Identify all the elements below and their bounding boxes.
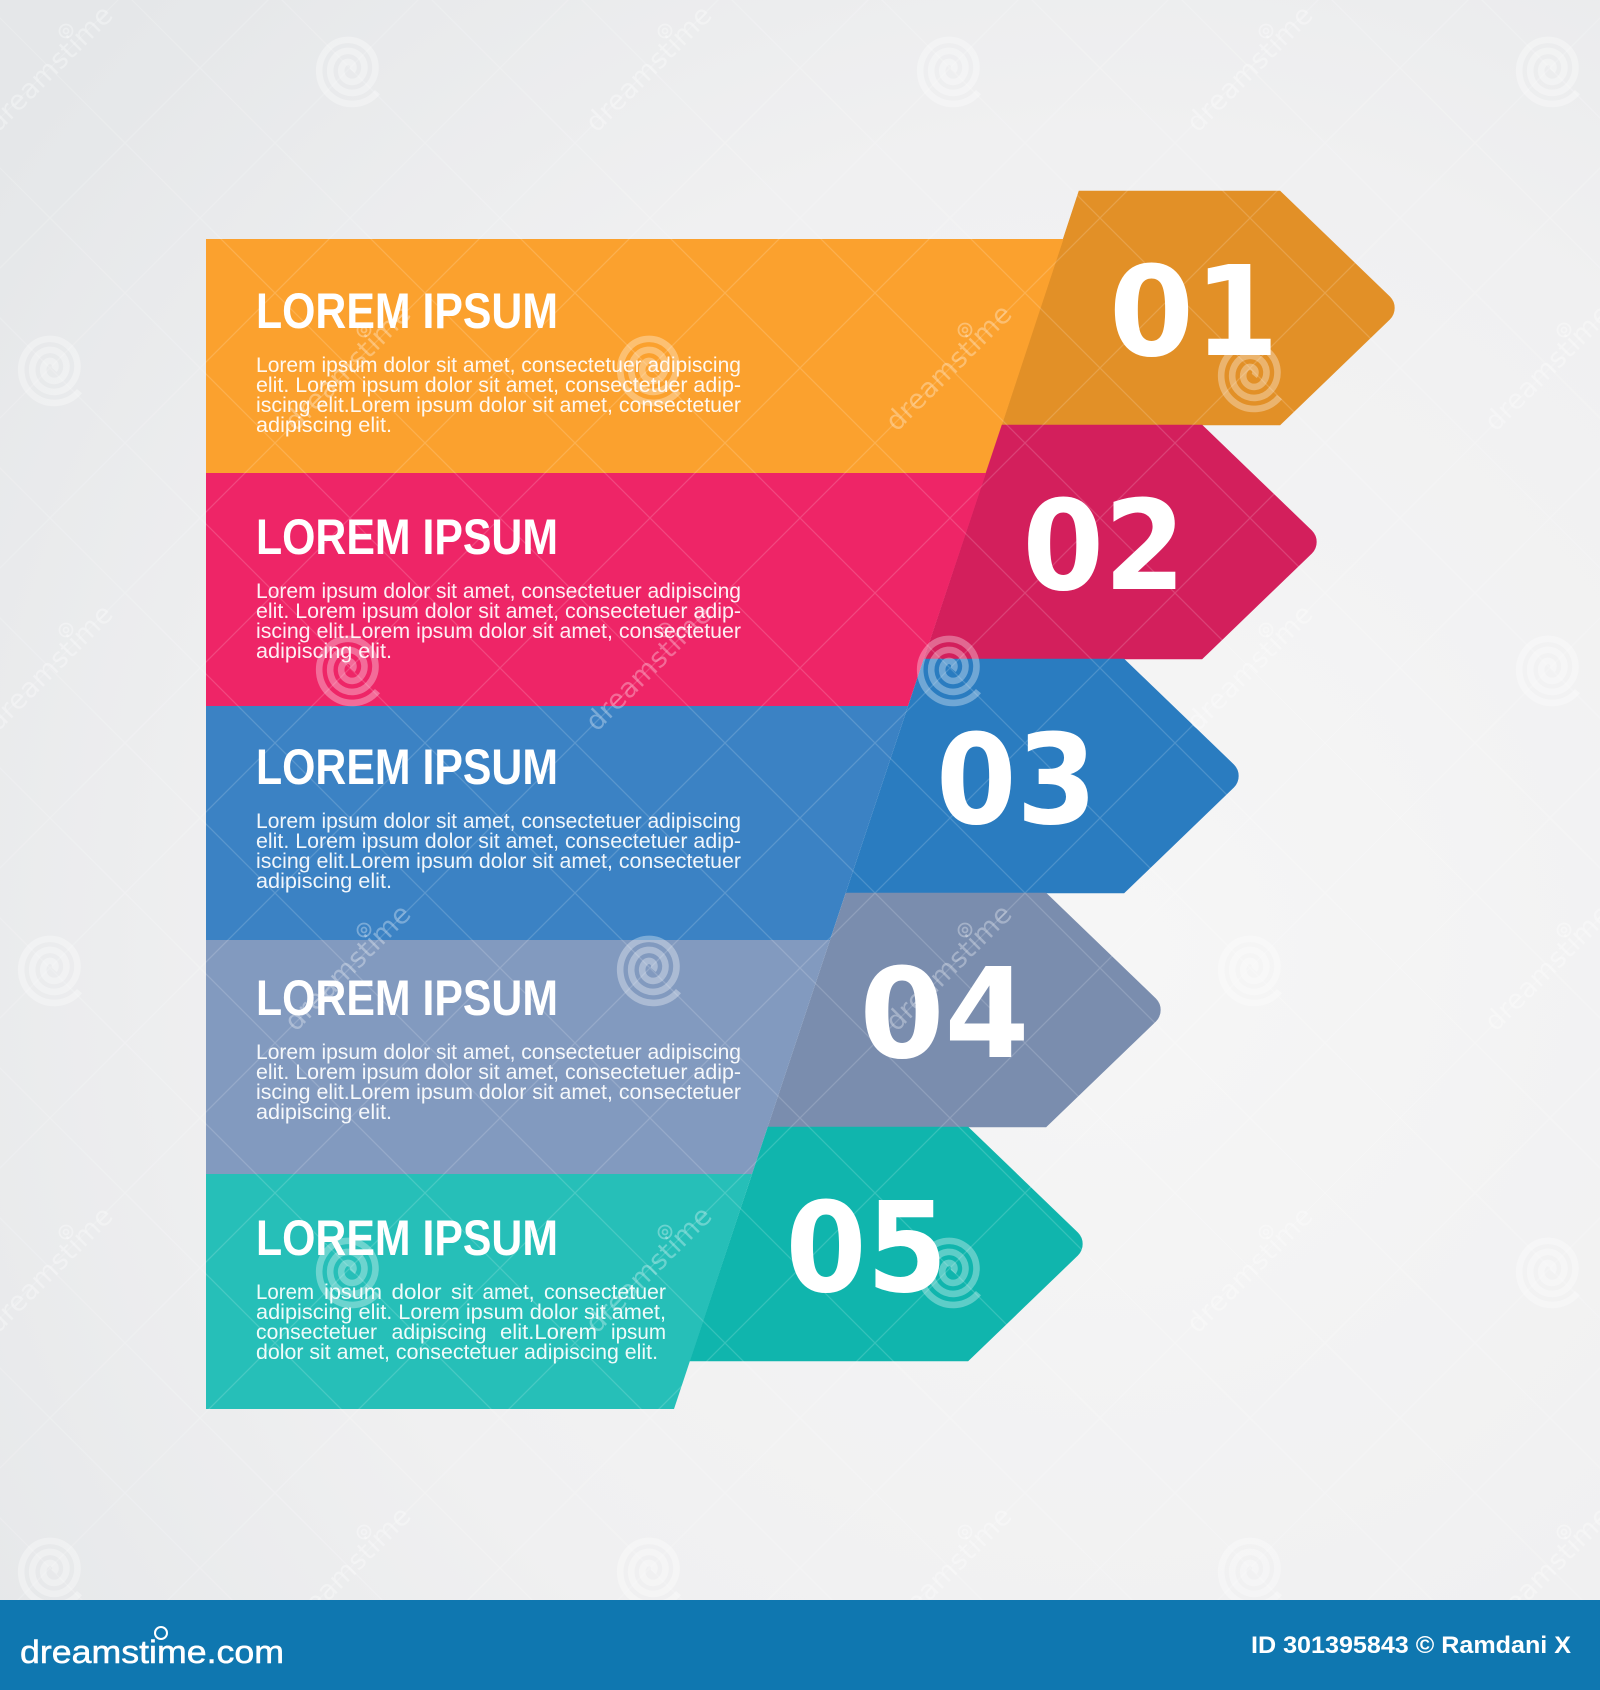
panel: step 5 [206,1127,1082,1409]
footer bar [0,1600,1600,1690]
body text 2: iscing elit.Lorem ipsum dolor sit amet, consectetuer [256,620,741,643]
watermark overlay: dreamstime [1181,599,1319,737]
body text 4: Lorem ipsum dolor sit amet, consectetuer adipiscing [256,1041,741,1064]
heading 4: LOREM IPSUM [256,970,558,1026]
footer credit: ID 301395843 © Ramdani X [1251,1632,1571,1659]
watermark overlay: dreamstime [279,899,417,1037]
body text 5: sit [451,1281,473,1304]
panel: step 1 [206,191,1394,473]
body text 5: consectetuer [544,1281,666,1304]
watermark overlay: dreamstime [580,1201,718,1339]
watermark overlay: dreamstime [880,1501,1018,1639]
body text 3: adipiscing elit. [256,870,392,893]
number 02: 02 [1022,474,1186,619]
panel body 1 [206,239,1064,473]
watermark overlay: dreamstime [1181,1201,1319,1339]
body text 1: elit. Lorem ipsum dolor sit amet, consectetuer adip- [256,374,741,397]
panel body 4 [206,940,830,1174]
watermark overlay: dreamstime [880,299,1018,437]
body text 5: dolor [392,1281,442,1304]
body text 1 [256,354,741,437]
watermark overlay: dreamstime [279,299,417,437]
arrow 2 [924,425,1316,659]
body text 4: adipiscing elit. [256,1101,392,1124]
body text 5: consectetuer [256,1321,377,1344]
watermark overlay: dreamstime [1181,0,1319,138]
panel body 5 [206,1174,752,1409]
body text 2: elit. Lorem ipsum dolor sit amet, consectetuer adip- [256,600,741,623]
body text 2: Lorem ipsum dolor sit amet, consectetuer adipiscing [256,580,741,603]
arrow 4 [768,893,1160,1127]
watermark overlay: dreamstime [279,1501,417,1639]
watermark overlay: dreamstime [580,599,718,737]
footer logo spiral [155,1627,167,1639]
panel: step 4 [206,893,1160,1174]
body text 3: elit. Lorem ipsum dolor sit amet, consectetuer adip- [256,830,741,853]
number 01: 01 [1109,240,1279,385]
body text 1: adipiscing elit. [256,414,392,437]
number 03: 03 [936,708,1097,853]
body text 5 [256,1281,666,1364]
arrow 5 [690,1127,1082,1361]
body text 1: Lorem ipsum dolor sit amet, consectetuer adipiscing [256,354,741,377]
body text 5: dolor sit amet, consectetuer adipiscing elit. [256,1341,658,1364]
body text 3: Lorem ipsum dolor sit amet, consectetuer adipiscing [256,810,741,833]
footer logo: dreamstime.com [20,1634,284,1670]
heading 3: LOREM IPSUM [256,739,558,795]
body text 2 [256,580,741,663]
body text 5: adipiscing elit. Lorem ipsum dolor sit amet, [256,1301,666,1324]
watermark overlay: dreamstime [880,899,1018,1037]
body text 4 [256,1041,741,1124]
heading 2: LOREM IPSUM [256,509,558,565]
body text 5: ipsum [324,1281,382,1304]
body text 5: Lorem [256,1281,314,1304]
arrow 3 [846,659,1238,893]
number 05: 05 [786,1176,948,1321]
arrow 1 [1002,191,1394,425]
body text 1: iscing elit.Lorem ipsum dolor sit amet, consectetuer [256,394,741,417]
body text 2: adipiscing elit. [256,640,392,663]
watermark overlay: dreamstime [580,0,718,138]
panel body 2 [206,473,986,706]
body text 5: adipiscing [392,1321,486,1344]
body text 3: iscing elit.Lorem ipsum dolor sit amet, consectetuer [256,850,741,873]
body text 5: elit.Lorem [500,1321,597,1344]
body text 4: iscing elit.Lorem ipsum dolor sit amet, consectetuer [256,1081,741,1104]
body text 5: amet, [482,1281,534,1304]
number 04: 04 [860,942,1030,1087]
body text 3 [256,810,741,893]
heading 1: LOREM IPSUM [256,283,558,339]
body text 5: ipsum [611,1321,666,1344]
body text 4: elit. Lorem ipsum dolor sit amet, consectetuer adip- [256,1061,741,1084]
panel body 3 [206,706,908,940]
panel: step 3 [206,659,1238,940]
panel: step 2 [206,425,1316,706]
heading 5: LOREM IPSUM [256,1210,558,1266]
